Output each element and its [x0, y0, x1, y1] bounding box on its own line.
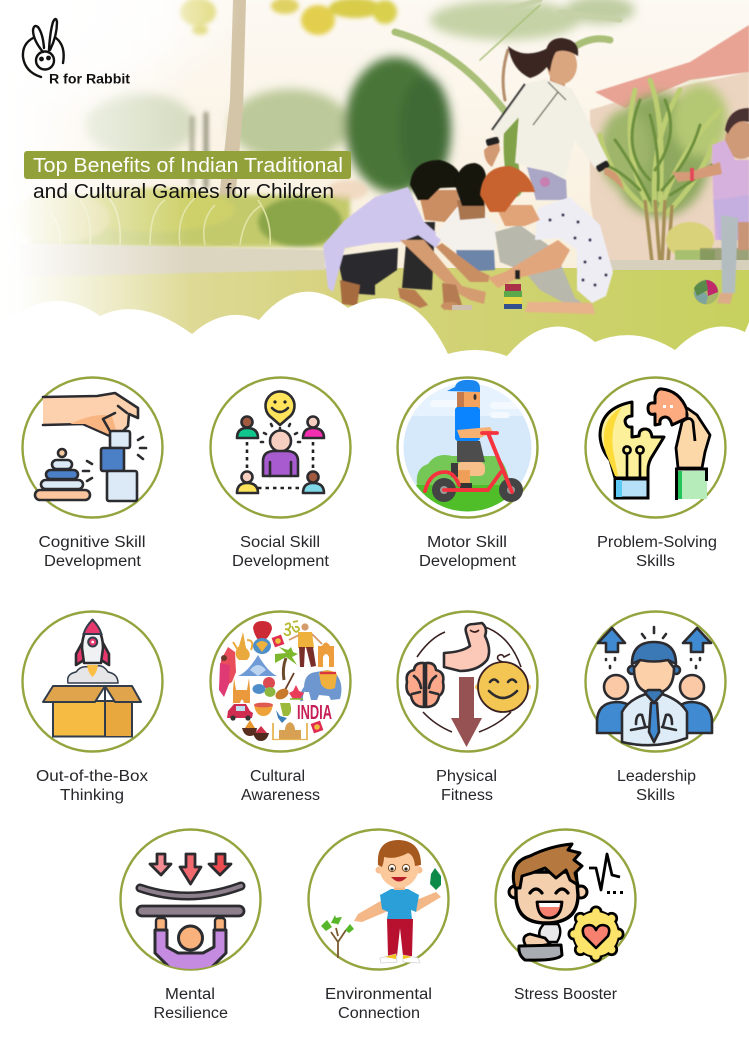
label: Social Skill	[240, 534, 320, 551]
cloud edge at the bottom of the photo	[0, 292, 749, 360]
label: Fitness	[441, 787, 493, 804]
title	[24, 151, 351, 203]
label: Cultural	[250, 768, 305, 785]
om symbol	[284, 621, 299, 635]
label: Development	[232, 553, 330, 570]
photo: boy in lavender shirt	[323, 160, 486, 308]
circle frame	[22, 378, 162, 518]
India Gate	[318, 642, 334, 667]
circle frame	[210, 612, 350, 752]
photo: girl on right in pink dress	[672, 108, 749, 304]
photo: low stone wall	[34, 244, 326, 275]
icon: hand placing blocks beside ring stack	[35, 393, 146, 501]
photo background: big pale palm fronds behind girl	[395, 0, 620, 190]
cobra in pot	[253, 621, 272, 640]
label	[325, 986, 432, 1022]
sitar	[285, 673, 294, 690]
photo background: tree trunk and shrubs	[10, 0, 368, 247]
photo: stacked wooden toy	[452, 284, 522, 310]
photo background: house with pink roof	[590, 25, 749, 270]
circle frame	[496, 830, 636, 970]
label: Skills	[636, 787, 675, 804]
label: Cognitive Skill	[38, 534, 146, 551]
item: Out-of-the-Box Thinking	[22, 612, 162, 804]
icon: laughing boy with heart gear and pulse	[509, 844, 624, 962]
label: Physical	[436, 768, 497, 785]
icon: boy riding a red scooter	[400, 380, 535, 515]
label: Out-of-the-Box	[36, 768, 148, 785]
photo background: sky	[58, 0, 749, 268]
label	[232, 534, 330, 570]
label: Development	[44, 553, 142, 570]
icon: social network of people	[237, 391, 324, 493]
label: Environmental	[325, 986, 432, 1003]
photo: patchwork ball	[694, 280, 718, 304]
label	[436, 768, 497, 804]
label: Mental	[165, 986, 215, 1003]
photo background: distant trees	[85, 0, 635, 193]
logo icon: rabbit	[23, 19, 64, 77]
label: Leadership	[617, 768, 696, 785]
label: Motor Skill	[427, 534, 507, 551]
item: Leadership Skills	[586, 612, 726, 804]
label	[241, 768, 320, 804]
label	[154, 986, 228, 1022]
label: Development	[419, 553, 517, 570]
label: Problem-Solving	[597, 534, 717, 551]
photo: girl running in white top	[484, 38, 624, 200]
photo: boy with orange hair and dotted shirt	[480, 166, 613, 314]
icon: brain, muscle, baby face and arrow	[406, 623, 531, 747]
circle frame	[210, 378, 350, 518]
circle frame	[398, 612, 538, 752]
label	[617, 768, 696, 804]
item: Stress Booster	[496, 830, 636, 1003]
item: Cognitive Skill Development	[22, 378, 162, 570]
small flower square	[272, 635, 284, 647]
dancer	[219, 647, 236, 690]
circle frame	[22, 612, 162, 752]
lotus temple	[238, 655, 277, 676]
photo: left and top white fade	[0, 78, 179, 322]
label: Awareness	[241, 787, 320, 804]
circle frame	[398, 378, 538, 518]
photo: lawn	[0, 268, 749, 360]
hero photo: children playing a traditional game outdoors	[0, 0, 749, 360]
label: Skills	[636, 553, 675, 570]
icon: person holding up a bending bar	[137, 854, 244, 972]
car	[227, 704, 253, 718]
circle frame	[308, 830, 448, 970]
icon: rocket launching out of a box	[43, 620, 141, 736]
bowl	[254, 705, 273, 716]
photo background: palm tree on right	[600, 80, 749, 264]
label	[419, 534, 517, 570]
item: Mental Resilience	[120, 830, 260, 1022]
title highlight band	[24, 151, 351, 179]
jug	[236, 632, 250, 660]
label: Stress Booster	[514, 986, 617, 1003]
small flower square	[311, 721, 323, 733]
item: Environmental Connection	[308, 830, 448, 1022]
peacock	[280, 703, 291, 716]
label: Thinking	[60, 787, 124, 804]
logo wordmark: R for Rabbit	[49, 72, 131, 86]
title line 2: and Cultural Games for Children	[33, 181, 334, 203]
circle frame	[120, 830, 260, 970]
item: Physical Fitness	[398, 612, 538, 804]
item: Motor Skill Development	[398, 378, 538, 570]
INDIA lettering: INDIA	[297, 702, 332, 724]
Charminar	[233, 678, 250, 703]
spice bowls	[242, 728, 257, 736]
icon: collage of Indian culture	[219, 621, 341, 741]
label: Connection	[338, 1005, 420, 1022]
label	[36, 768, 148, 804]
photo background: yellow leaf clusters	[180, 0, 397, 35]
circle frame	[586, 378, 726, 518]
item: Problem-Solving Skills	[586, 378, 726, 570]
palm	[283, 658, 286, 680]
item: Cultural Awareness	[210, 612, 350, 804]
icon: boy planting a sapling	[321, 840, 441, 963]
icon: light bulb puzzle with hand	[600, 389, 710, 500]
label: Resilience	[154, 1005, 228, 1022]
man in yellow kurta	[301, 623, 309, 631]
fruits	[263, 677, 275, 689]
label	[597, 534, 717, 570]
title line 1: Top Benefits of Indian Traditional	[33, 155, 343, 177]
icon: leader with team and upward arrows	[597, 627, 712, 745]
circle frame	[586, 612, 726, 752]
logo: R for Rabbit	[23, 19, 131, 86]
Taj Mahal	[279, 722, 301, 739]
photo: boy in white shirt	[435, 163, 497, 310]
item: Social Skill Development	[210, 378, 350, 570]
label	[38, 534, 146, 570]
elephant	[304, 670, 341, 700]
lotus flower	[289, 685, 304, 699]
